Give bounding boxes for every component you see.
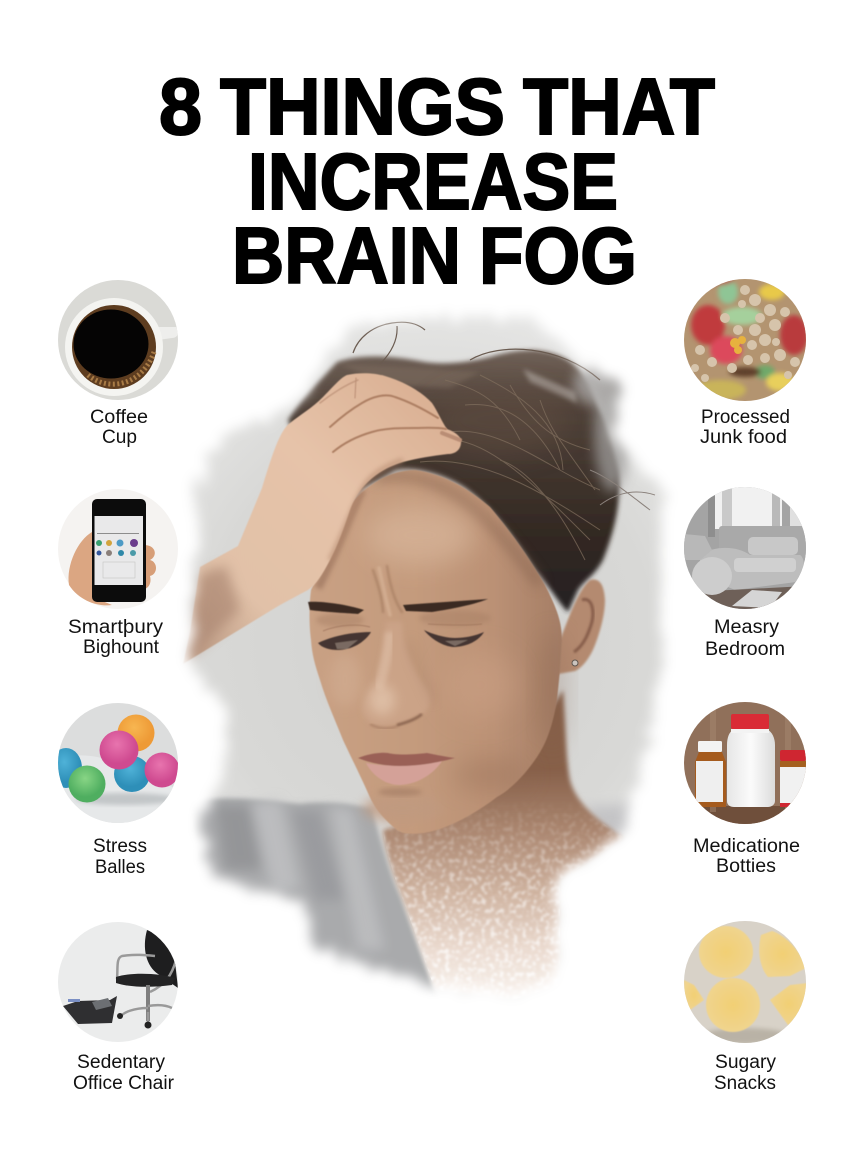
hair [288,350,619,612]
title: 8 [159,62,202,151]
label: stress balls: Balles [95,857,145,878]
label: smartphone [68,617,164,658]
app icons [96,533,139,578]
label: stress balls [93,836,147,878]
photo backdrop [185,313,669,976]
ear [558,580,605,674]
faint far shoulder [590,802,630,834]
label: medication bottles: Botties [716,856,776,877]
backrest [145,930,178,988]
label: sugary snacks [714,1052,777,1094]
label: coffee cup [90,407,148,448]
title: BRAIN [232,211,461,300]
title: THINGS [220,62,505,151]
item: stress balls [50,703,180,823]
label: medication bottles: Medicatione [693,836,800,857]
label: sugary snacks: Snacks [714,1073,776,1094]
label: medication bottles [693,836,800,877]
armrest [117,955,155,979]
speckled fade on neck [384,810,620,988]
item: office chair [58,922,178,1042]
desk device [63,996,117,1024]
label: processed junk food: Junk food [700,427,787,448]
floor [702,586,792,609]
phone body [92,499,146,602]
shadow under lip [378,788,422,796]
hand underside shadow [330,460,403,560]
item: coffee cup [58,280,178,400]
label: office chair: Office Chair [73,1073,175,1094]
right bottle [780,750,806,761]
seat [116,974,175,987]
hair strands [353,322,655,510]
label: coffee cup: Cup [102,427,137,448]
post and base [146,985,150,1021]
forehead wrinkles [373,566,402,615]
title: INCREASE [248,137,618,226]
neck [383,690,625,1000]
label: smartphone: Smartþury [68,617,164,638]
label: messy bedroom: Measry [714,617,780,638]
face shading [316,476,564,822]
title [159,62,715,300]
label: office chair: Sedentary [77,1052,165,1073]
face [310,470,562,834]
curtains [712,487,782,529]
sofa [719,526,806,561]
hand [69,532,112,605]
title: THAT [523,62,715,151]
title: FOG [479,211,637,300]
amber bottle [695,752,726,807]
rug and papers [732,590,782,608]
label: office chair [73,1052,175,1094]
lips [358,753,455,785]
central photo: woman holding her head [183,313,669,995]
eyebrows [308,599,488,614]
wrist shade [186,565,240,662]
label: stress balls: Stress [93,836,147,857]
sweater folds [215,800,385,950]
finger lines [320,378,460,452]
label: processed junk food [700,407,790,448]
large white bottle [727,730,775,807]
item: sugary snacks [684,921,808,1044]
label: coffee cup: Coffee [90,407,148,428]
label: smartphone: Bighount [83,637,160,658]
sweater [190,798,438,1000]
eyes [318,624,484,650]
item: smartphone [58,489,178,609]
arm and hand [183,373,461,664]
nose [363,625,427,729]
label: sugary snacks: Sugary [715,1052,777,1073]
label: messy bedroom: Bedroom [705,639,785,660]
item: messy bedroom [684,487,806,609]
pouf [692,557,732,595]
earring [572,660,578,666]
label: messy bedroom [705,617,785,660]
label: processed junk food: Processed [701,407,790,428]
hair highlights and fog [340,364,630,492]
item: processed junk food [684,274,808,401]
phone screen [94,516,143,585]
item: medication bottles [684,702,806,824]
